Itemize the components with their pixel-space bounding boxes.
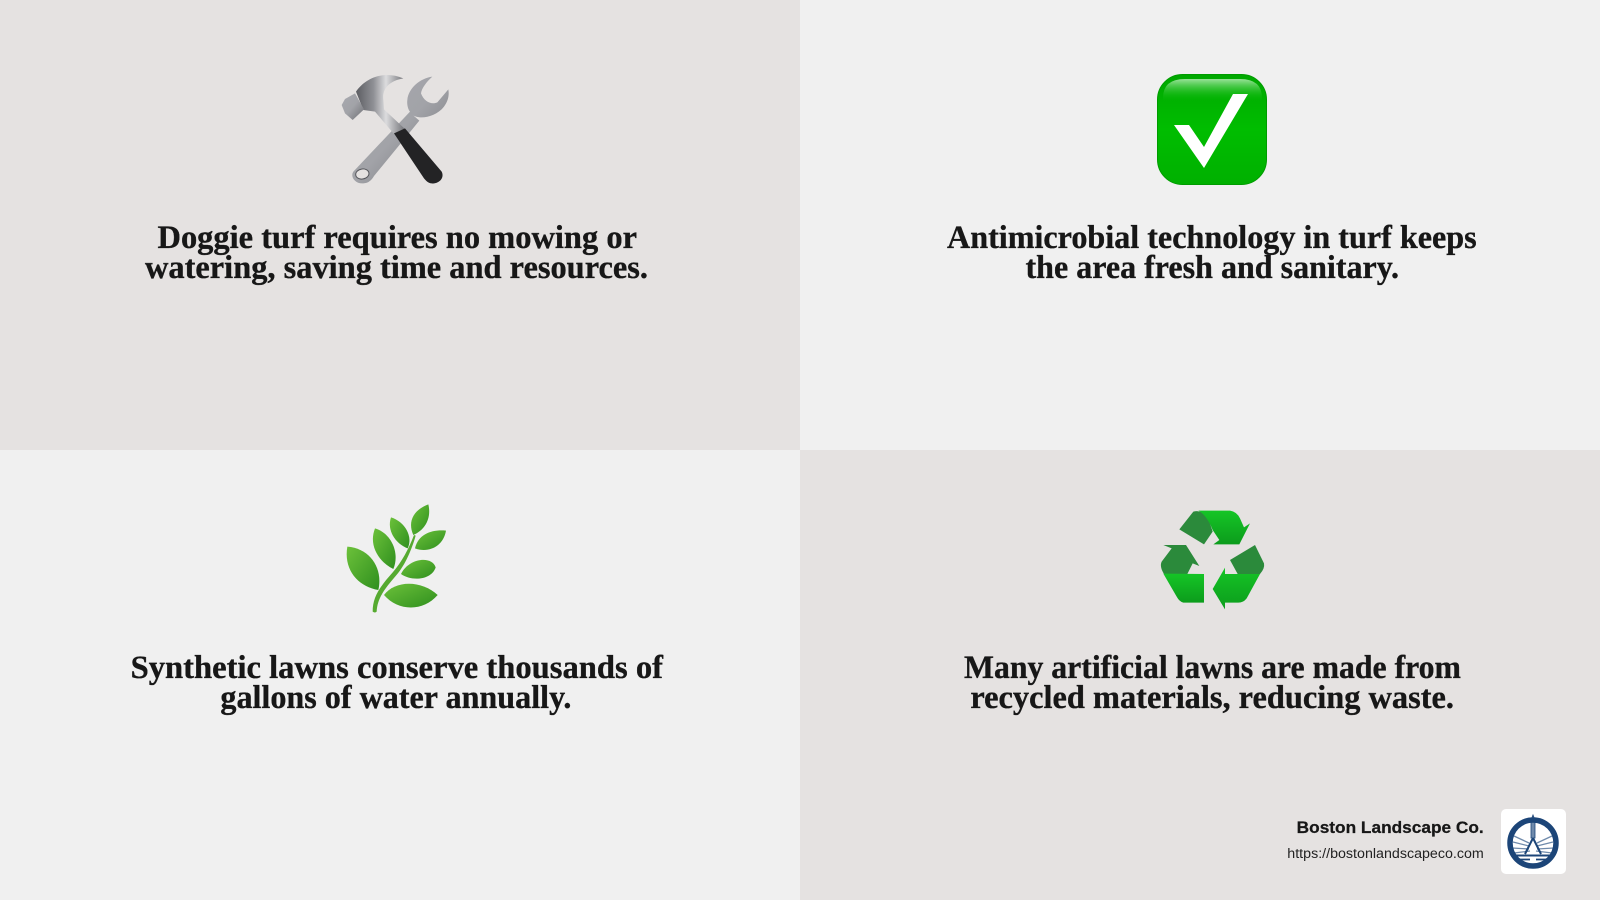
text: recycled materials: recycled materials, reducing waste. bbox=[970, 680, 1454, 716]
icon: company logo bbox=[1501, 809, 1566, 874]
text: recycled materials bbox=[964, 650, 1461, 716]
text: synthetic lawns bbox=[131, 650, 664, 716]
branding footer bbox=[1287, 809, 1566, 874]
text: antimicrobial technology: Antimicrobial technology in turf keeps bbox=[947, 220, 1477, 256]
panel: no maintenance bbox=[0, 0, 800, 450]
text: no mowing or watering: Doggie turf requires no mowing or bbox=[158, 220, 637, 256]
text: no mowing or watering: watering, saving time and resources. bbox=[145, 250, 648, 286]
company name: Boston Landscape Co. bbox=[1297, 818, 1484, 837]
text: no mowing or watering bbox=[145, 220, 648, 286]
text: synthetic lawns: Synthetic lawns conserve thousands of bbox=[131, 650, 664, 686]
text: recycled materials: Many artificial lawns are made from bbox=[964, 650, 1461, 686]
panel: water conservation bbox=[0, 450, 800, 900]
panel: recycled materials bbox=[800, 450, 1600, 900]
text: antimicrobial technology bbox=[947, 220, 1477, 286]
company url: https://bostonlandscapeco.com bbox=[1287, 846, 1484, 861]
text: synthetic lawns: gallons of water annually. bbox=[220, 680, 571, 716]
text: antimicrobial technology: the area fresh and sanitary. bbox=[1026, 250, 1399, 286]
icon: green check mark bbox=[1158, 74, 1266, 184]
icon: hammer and wrench bbox=[342, 75, 449, 183]
panel: antimicrobial bbox=[800, 0, 1600, 450]
icon: green herb bbox=[347, 504, 446, 612]
icon: recycling symbol bbox=[1161, 511, 1264, 609]
